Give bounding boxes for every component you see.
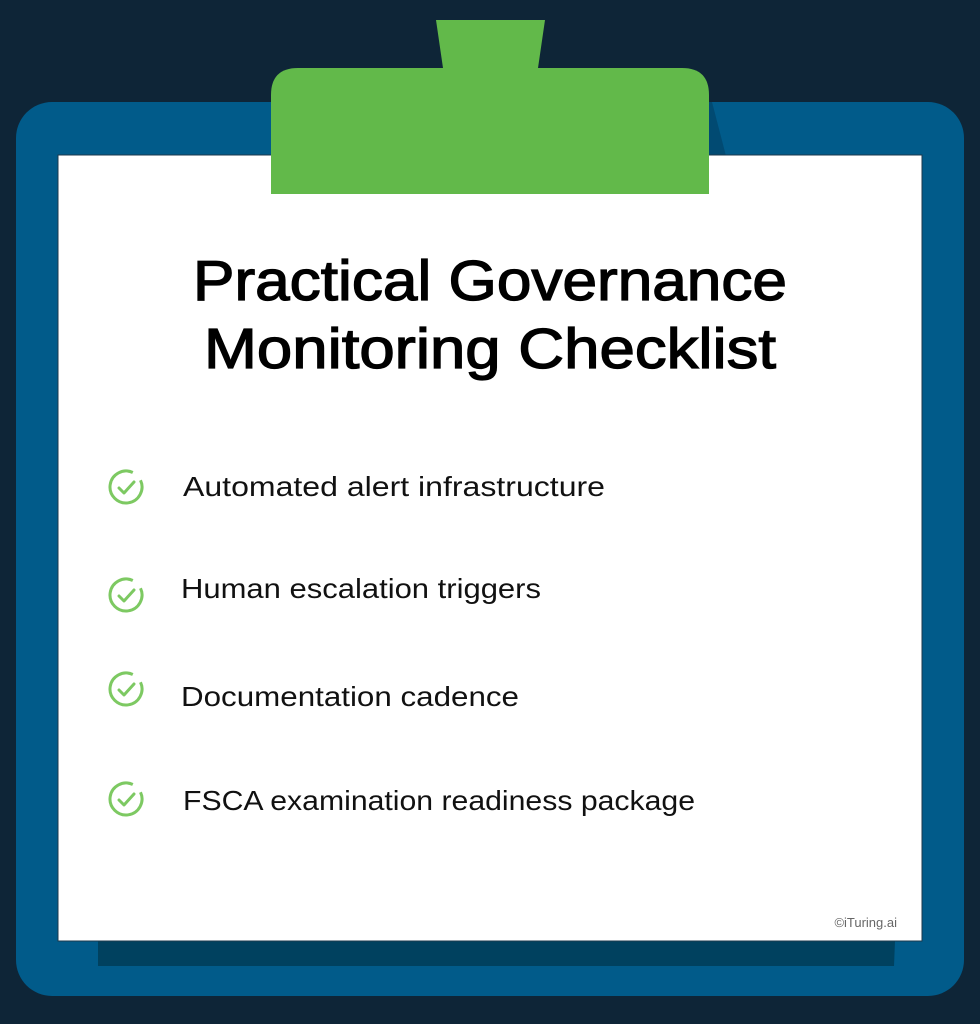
item 4: FSCA examination readiness package <box>183 785 695 816</box>
item 3 <box>110 673 519 712</box>
item 2: Human escalation triggers <box>181 573 541 604</box>
clip <box>271 20 709 194</box>
clip shadow <box>705 102 726 156</box>
item 2 <box>110 573 541 611</box>
item 3: Documentation cadence <box>181 681 519 712</box>
paper shadow <box>98 941 895 966</box>
title: Monitoring Checklist <box>204 317 776 381</box>
item 1: Automated alert infrastructure <box>183 471 605 502</box>
watermark: ©iTuring.ai <box>834 915 897 930</box>
paper <box>58 155 922 941</box>
title: Practical Governance <box>193 249 787 313</box>
checklist <box>110 471 695 816</box>
title <box>193 249 787 381</box>
